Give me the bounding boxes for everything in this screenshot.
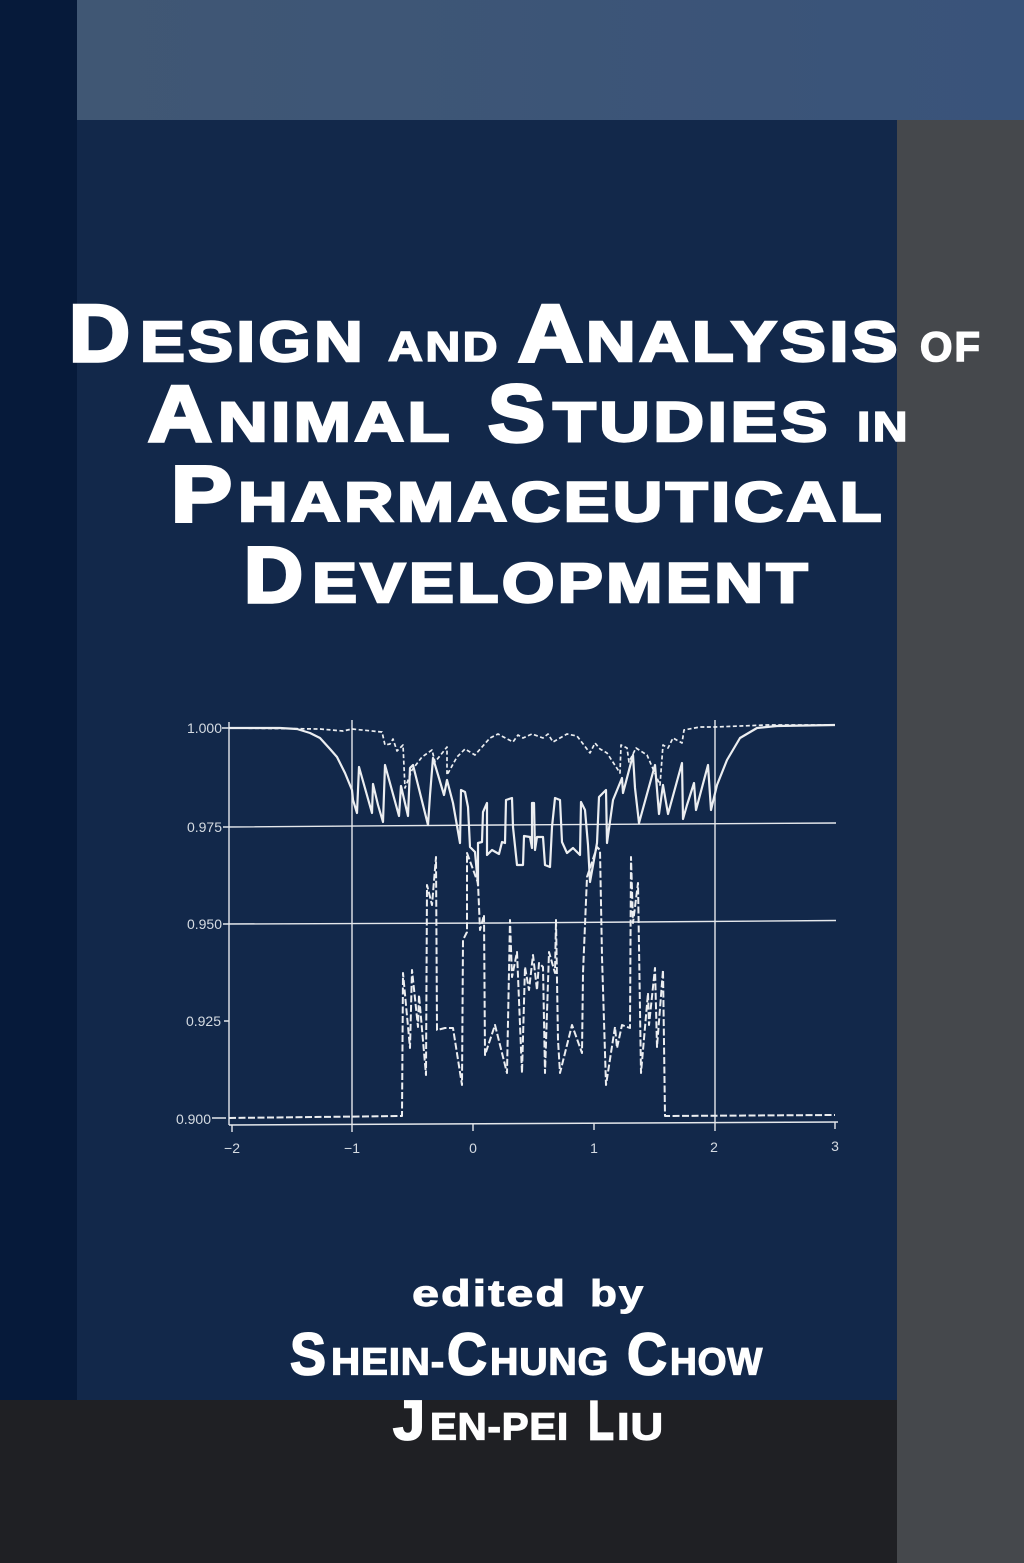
x axis labels: 3	[831, 1138, 839, 1154]
title: OF	[920, 323, 982, 370]
author: Jen-pei Liu: IU	[617, 1406, 664, 1448]
editor credit	[290, 1273, 763, 1452]
chart axes and grid lines	[212, 720, 838, 1132]
panel: right grey band	[897, 120, 1024, 1563]
title: NALYSIS	[586, 310, 901, 374]
author: Shein-Chung Chow: HUNG	[490, 1342, 609, 1384]
title: S	[488, 369, 545, 459]
y axis labels: 0.900	[176, 1111, 211, 1127]
author: Shein-Chung Chow: S	[290, 1322, 326, 1388]
author: Shein-Chung Chow: C	[447, 1322, 487, 1388]
title: A	[518, 289, 583, 379]
x axis labels: −1	[344, 1140, 360, 1156]
x axis labels: 2	[710, 1139, 718, 1155]
edited by label: by	[590, 1273, 645, 1314]
panel: left dark spine band	[0, 0, 77, 1400]
title: P	[171, 449, 232, 538]
title: NIMAL	[218, 390, 453, 453]
y axis labels: 1.000	[187, 720, 222, 736]
line chart	[176, 720, 839, 1156]
x axis labels: 0	[469, 1140, 477, 1156]
panel: top blue band	[77, 0, 1024, 120]
title: D	[244, 530, 303, 619]
author: Jen-pei Liu: J	[393, 1388, 425, 1452]
x axis labels: −2	[224, 1140, 240, 1156]
panel: bottom black band	[0, 1400, 897, 1563]
author: Shein-Chung Chow: HOW	[670, 1342, 763, 1384]
author: Shein-Chung Chow: C	[627, 1322, 667, 1388]
x axis labels	[224, 1138, 839, 1156]
solid curve	[229, 725, 835, 885]
edited by label: edited	[412, 1273, 567, 1314]
title: HARMACEUTICAL	[238, 470, 885, 533]
title: A	[148, 369, 212, 458]
lower dashed curve	[229, 847, 835, 1118]
author: Shein-Chung Chow: HEIN-	[331, 1342, 445, 1384]
title: IN	[857, 403, 910, 450]
title: D	[69, 289, 130, 379]
x axis labels: 1	[590, 1140, 598, 1156]
title: EVELOPMENT	[312, 551, 811, 614]
title: AND	[388, 323, 500, 370]
y axis labels: 0.950	[187, 916, 222, 932]
title	[69, 289, 982, 619]
title: TUDIES	[553, 390, 831, 453]
panel: navy cover background	[77, 120, 897, 1400]
author: Jen-pei Liu: EN-PEI	[430, 1406, 569, 1448]
y axis labels: 0.925	[186, 1013, 221, 1029]
y axis labels	[176, 720, 222, 1127]
y axis labels: 0.975	[187, 819, 222, 835]
upper dashed curve	[229, 725, 835, 788]
author: Jen-pei Liu: L	[588, 1388, 614, 1452]
title: ESIGN	[140, 310, 366, 374]
